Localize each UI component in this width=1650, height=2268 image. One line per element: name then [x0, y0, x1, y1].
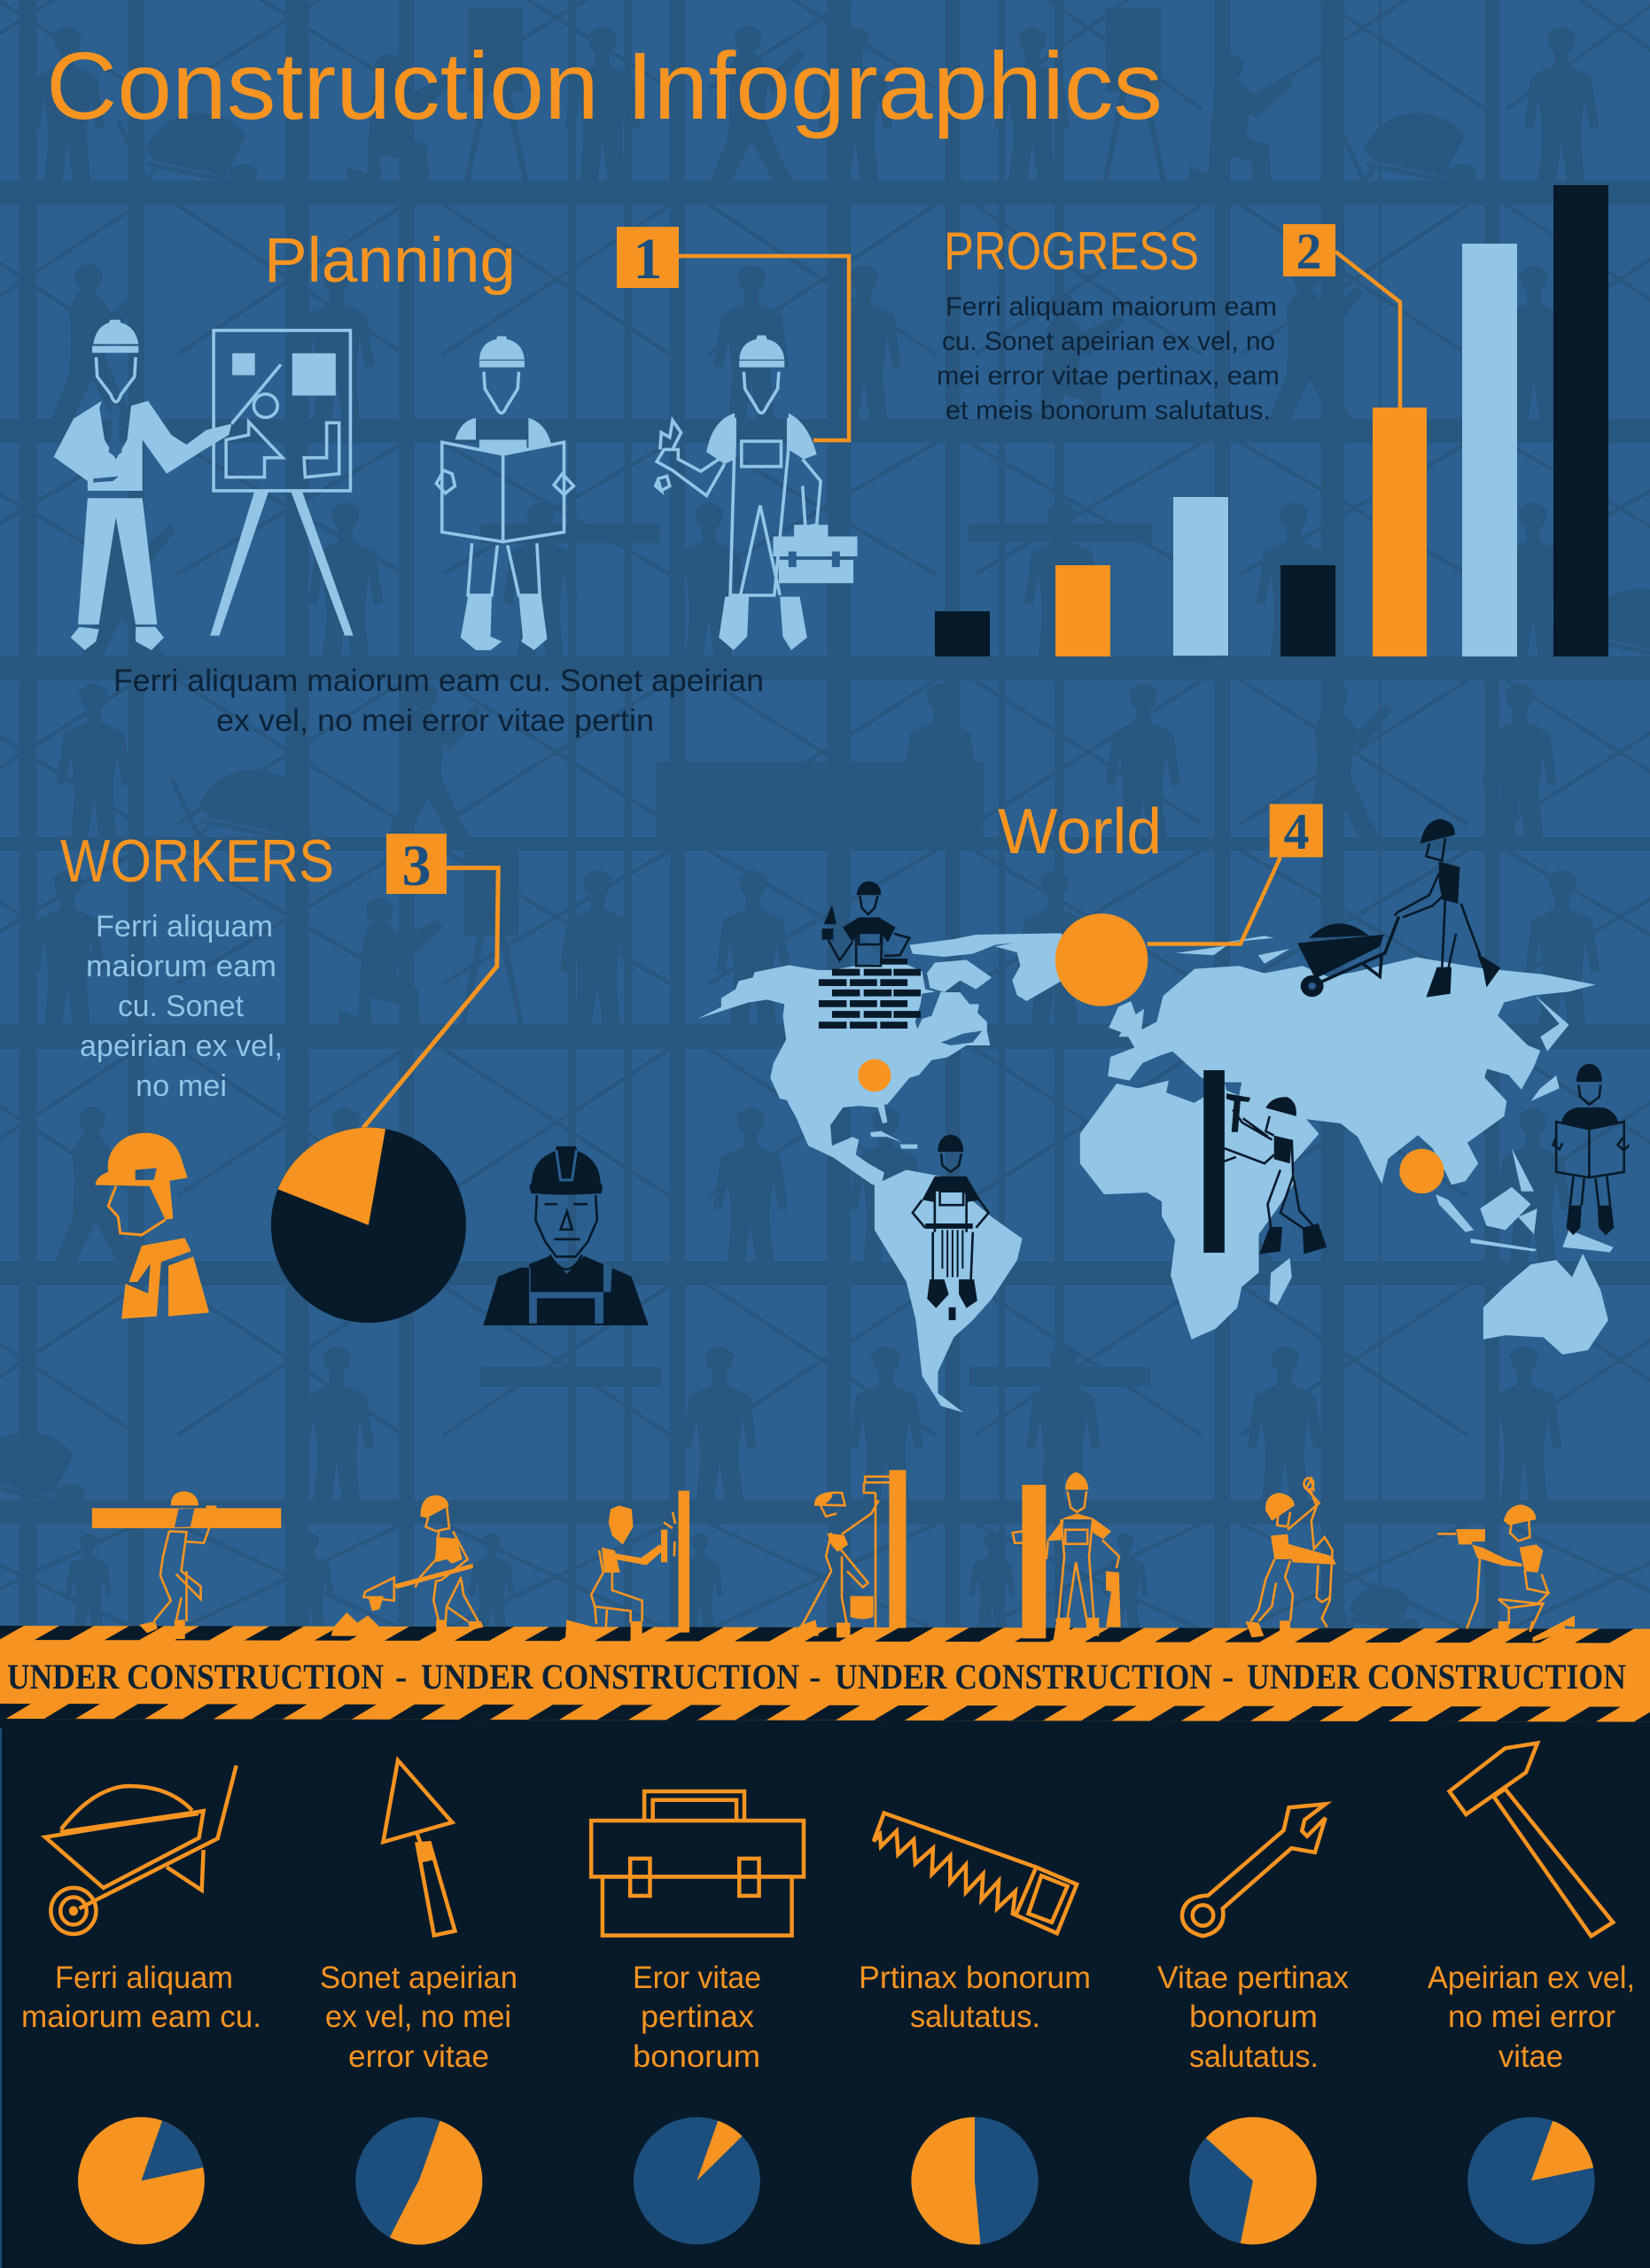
panel: workers [60, 827, 649, 1325]
icon: trowel [383, 1760, 455, 1936]
caption 1 [21, 1961, 261, 2034]
background scaffolding [0, 0, 1650, 1630]
banner text: UNDER CONSTRUCTION [835, 1657, 1212, 1697]
icon: hammer [1450, 1744, 1613, 1936]
banner text: UNDER CONSTRUCTION [7, 1657, 384, 1697]
background worker silhouettes [0, 8, 1650, 1631]
presenter [54, 320, 231, 650]
icon: saw [874, 1813, 1077, 1933]
progress text [937, 292, 1280, 425]
caption 2: error vitae [348, 2039, 489, 2074]
caption 6 [1428, 1961, 1635, 2074]
progress text: et meis bonorum salutatus. [946, 396, 1271, 425]
caption 3 [633, 1961, 761, 2074]
caption 2: Sonet apeirian [320, 1961, 518, 1995]
pie 1 [78, 2117, 205, 2245]
map markers [858, 913, 1444, 1193]
badge 3 [386, 834, 447, 898]
banner text [7, 1657, 1626, 1697]
progress text: Ferri aliquam maiorum eam [946, 292, 1277, 322]
heading: world: World [998, 796, 1162, 867]
panel: tools row [21, 1744, 1635, 2245]
heading: planning: Planning [264, 226, 516, 296]
icon: hammer worker at pillar [1203, 1070, 1327, 1254]
caption 3: pertinax [641, 2000, 754, 2034]
caption 6: Apeirian ex vel, [1428, 1961, 1635, 1995]
icon: worker side profile [96, 1133, 209, 1319]
badge 4 [1270, 804, 1323, 858]
planning text: Ferri aliquam maiorum eam cu. Sonet apeirian [113, 664, 764, 698]
banner text: - [1222, 1657, 1234, 1697]
icon: worker front portrait [483, 1146, 649, 1325]
connector 2 [1335, 252, 1400, 408]
painter worker [791, 1470, 906, 1637]
panel: planning [54, 226, 858, 738]
workers text: apeirian ex vel, [80, 1029, 283, 1063]
connector 4 [1148, 858, 1280, 944]
worker with drill [1437, 1504, 1575, 1642]
connector 1 [679, 256, 849, 440]
workers text [80, 910, 283, 1103]
bottom dark panel [0, 1714, 1650, 2268]
icon: map reading worker [1553, 1064, 1629, 1235]
pie 6 [1467, 2117, 1595, 2245]
worker carrying plank [92, 1491, 281, 1639]
caution tape banner [0, 1626, 1650, 1722]
badge 2 [1283, 222, 1335, 280]
caption 6: no mei error [1448, 2000, 1615, 2034]
world map [697, 933, 1614, 1412]
planning text: ex vel, no mei error vitae pertin [216, 703, 654, 738]
panel: progress [935, 185, 1608, 656]
welder worker [564, 1491, 689, 1648]
badge 2: 2 [1296, 222, 1322, 280]
planning text [113, 664, 764, 738]
caption 5 [1157, 1961, 1349, 2074]
progress text: cu. Sonet apeirian ex vel, no [942, 327, 1275, 356]
connector 3 [363, 868, 498, 1129]
construction workers row [92, 1470, 1575, 1648]
icon: wrench [1182, 1804, 1326, 1936]
worker with shovel [331, 1495, 484, 1639]
pie 5 [1189, 2117, 1317, 2245]
caption 4: salutatus. [910, 2000, 1040, 2034]
worker with saw and pillar [1013, 1472, 1121, 1641]
badge 1: 1 [633, 227, 663, 291]
caption 2: ex vel, no mei [325, 2000, 511, 2034]
caption 1: maiorum eam cu. [21, 2000, 261, 2034]
icon: jackhammer worker [913, 1135, 989, 1320]
caption 4: Prtinax bonorum [859, 1961, 1091, 1995]
caption 5: Vitae pertinax [1157, 1961, 1349, 1995]
workers text: cu. Sonet [118, 990, 245, 1023]
heading: progress: PROGRESS [944, 221, 1199, 281]
pie chart [271, 1128, 466, 1323]
caption 6: vitae [1498, 2039, 1563, 2074]
icon: toolbox [591, 1791, 804, 1936]
workers text: no mei [136, 1069, 227, 1103]
workers text: Ferri aliquam [96, 910, 273, 944]
worker with map [436, 337, 573, 650]
heading: workers: WORKERS [60, 827, 334, 895]
caption 5: salutatus. [1189, 2039, 1319, 2074]
banner text: UNDER CONSTRUCTION [421, 1657, 799, 1697]
caption 3: Eror vitae [633, 1961, 761, 1995]
banner text: - [395, 1657, 407, 1697]
pie 4 [911, 2117, 1039, 2245]
icon: wheelbarrow worker [1297, 819, 1500, 998]
caption 5: bonorum [1189, 2000, 1318, 2034]
presentation board [210, 330, 354, 635]
caption 3: bonorum [633, 2039, 760, 2074]
caption 1: Ferri aliquam [55, 1961, 233, 1995]
badge 4 digit: 4 [1283, 803, 1310, 860]
badge 1 [617, 227, 679, 291]
caption 2 [320, 1961, 518, 2074]
pie 2 [355, 2117, 482, 2245]
progress text: mei error vitae pertinax, eam [937, 361, 1280, 391]
worker with cable [1246, 1478, 1336, 1641]
panel: world [697, 796, 1629, 1412]
badge 3: 3 [402, 834, 431, 898]
banner text: - [809, 1657, 821, 1697]
bar chart [935, 185, 1608, 656]
tool captions [21, 1961, 1635, 2074]
title: Construction Infographics [46, 32, 1163, 139]
figures [54, 320, 858, 650]
caption 4 [859, 1961, 1091, 2034]
icon: bricklayer [819, 882, 921, 1029]
icon: wheelbarrow [45, 1766, 237, 1934]
pie charts [78, 2117, 1595, 2245]
pie 3 [634, 2117, 760, 2245]
mechanic with wrench and toolbox [656, 335, 858, 650]
workers text: maiorum eam [86, 950, 276, 983]
left edge strip [0, 1728, 2, 2268]
